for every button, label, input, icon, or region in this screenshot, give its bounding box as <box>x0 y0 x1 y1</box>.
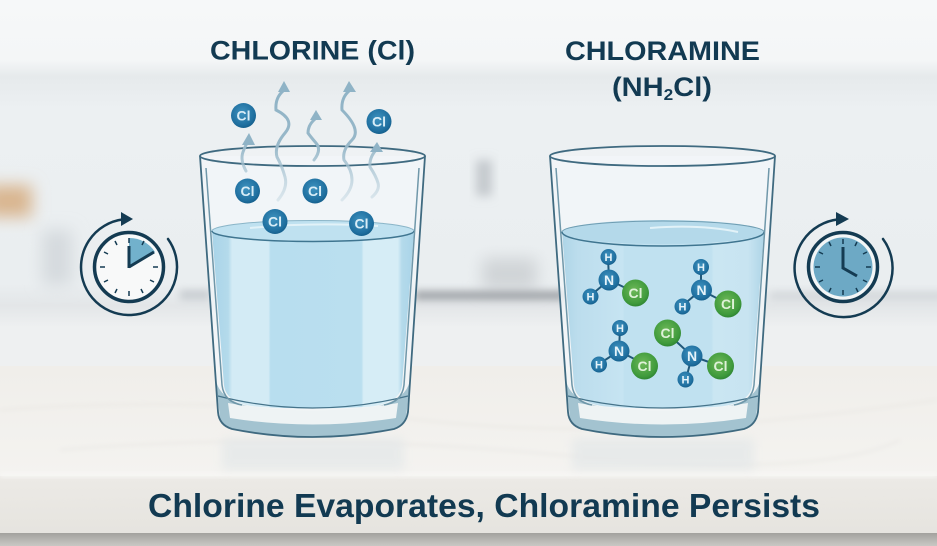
molecule 3: N <box>614 343 624 359</box>
molecule 4: Cl <box>660 325 674 341</box>
heading: chlorine: CHLORINE (Cl) <box>210 36 415 66</box>
molecule 4: Cl <box>714 358 728 374</box>
water <box>212 231 414 408</box>
heading: chloramine: 2 <box>664 87 673 104</box>
chlorine atoms: Cl <box>240 183 254 199</box>
marble countertop <box>0 366 937 546</box>
molecule 3: H <box>595 360 603 372</box>
molecule 2: H <box>679 302 687 314</box>
glass: chlorine <box>200 146 425 437</box>
molecule 1: H <box>587 292 595 304</box>
molecule 4: N <box>687 348 697 364</box>
molecule 1 <box>582 249 649 306</box>
wavy arrow 3 <box>308 110 322 160</box>
icon: clock, chloramine <box>795 212 893 317</box>
heading: chloramine: (NH <box>612 72 660 102</box>
chlorine atoms: Cl <box>308 183 322 199</box>
molecule 2 <box>674 259 742 318</box>
molecule 4: H <box>682 374 690 386</box>
heading: chloramine: CHLORAMINE <box>565 36 760 66</box>
heading: chloramine <box>565 36 760 104</box>
heading: chloramine: Cl) <box>673 72 712 102</box>
chlorine atoms <box>231 103 392 236</box>
wavy arrow 5 <box>370 142 383 197</box>
chlorine atoms: Cl <box>354 216 368 232</box>
chlorine atoms: Cl <box>236 108 250 124</box>
molecule 2: H <box>697 262 705 274</box>
molecule 3: Cl <box>638 358 652 374</box>
glass base <box>566 380 760 436</box>
molecule 3: H <box>616 323 624 335</box>
glass body <box>200 156 425 437</box>
glass walls and rim <box>200 156 425 437</box>
molecule 1: N <box>604 272 614 288</box>
wavy arrow 2 <box>276 81 290 200</box>
molecule 3 <box>591 320 658 380</box>
molecule 2: Cl <box>721 296 735 312</box>
molecule 1: Cl <box>628 285 642 301</box>
water <box>562 231 764 408</box>
glass base <box>216 380 410 436</box>
molecule 1: H <box>605 252 613 264</box>
chlorine atoms: Cl <box>268 214 282 230</box>
evaporation arrows <box>242 81 383 200</box>
glass walls and rim <box>550 156 775 437</box>
glass body <box>550 156 775 437</box>
molecule 2: N <box>696 282 707 298</box>
glass: chloramine <box>550 146 775 437</box>
wavy arrow 4 <box>342 81 356 200</box>
icon: clock, chlorine <box>81 212 177 315</box>
caption: Chlorine Evaporates, Chloramine Persists <box>148 487 820 524</box>
molecule 4 <box>654 320 734 388</box>
chlorine atoms: Cl <box>372 114 386 130</box>
wavy arrow 1 <box>242 133 255 171</box>
